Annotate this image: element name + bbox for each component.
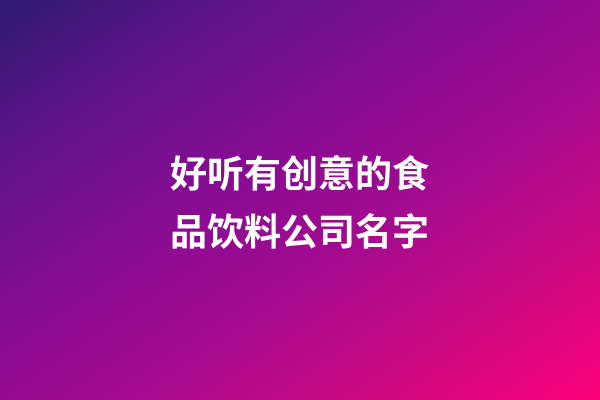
title: 好听有创意的食 — [170, 154, 429, 195]
title — [170, 154, 429, 253]
title: 品饮料公司名字 — [170, 212, 429, 253]
